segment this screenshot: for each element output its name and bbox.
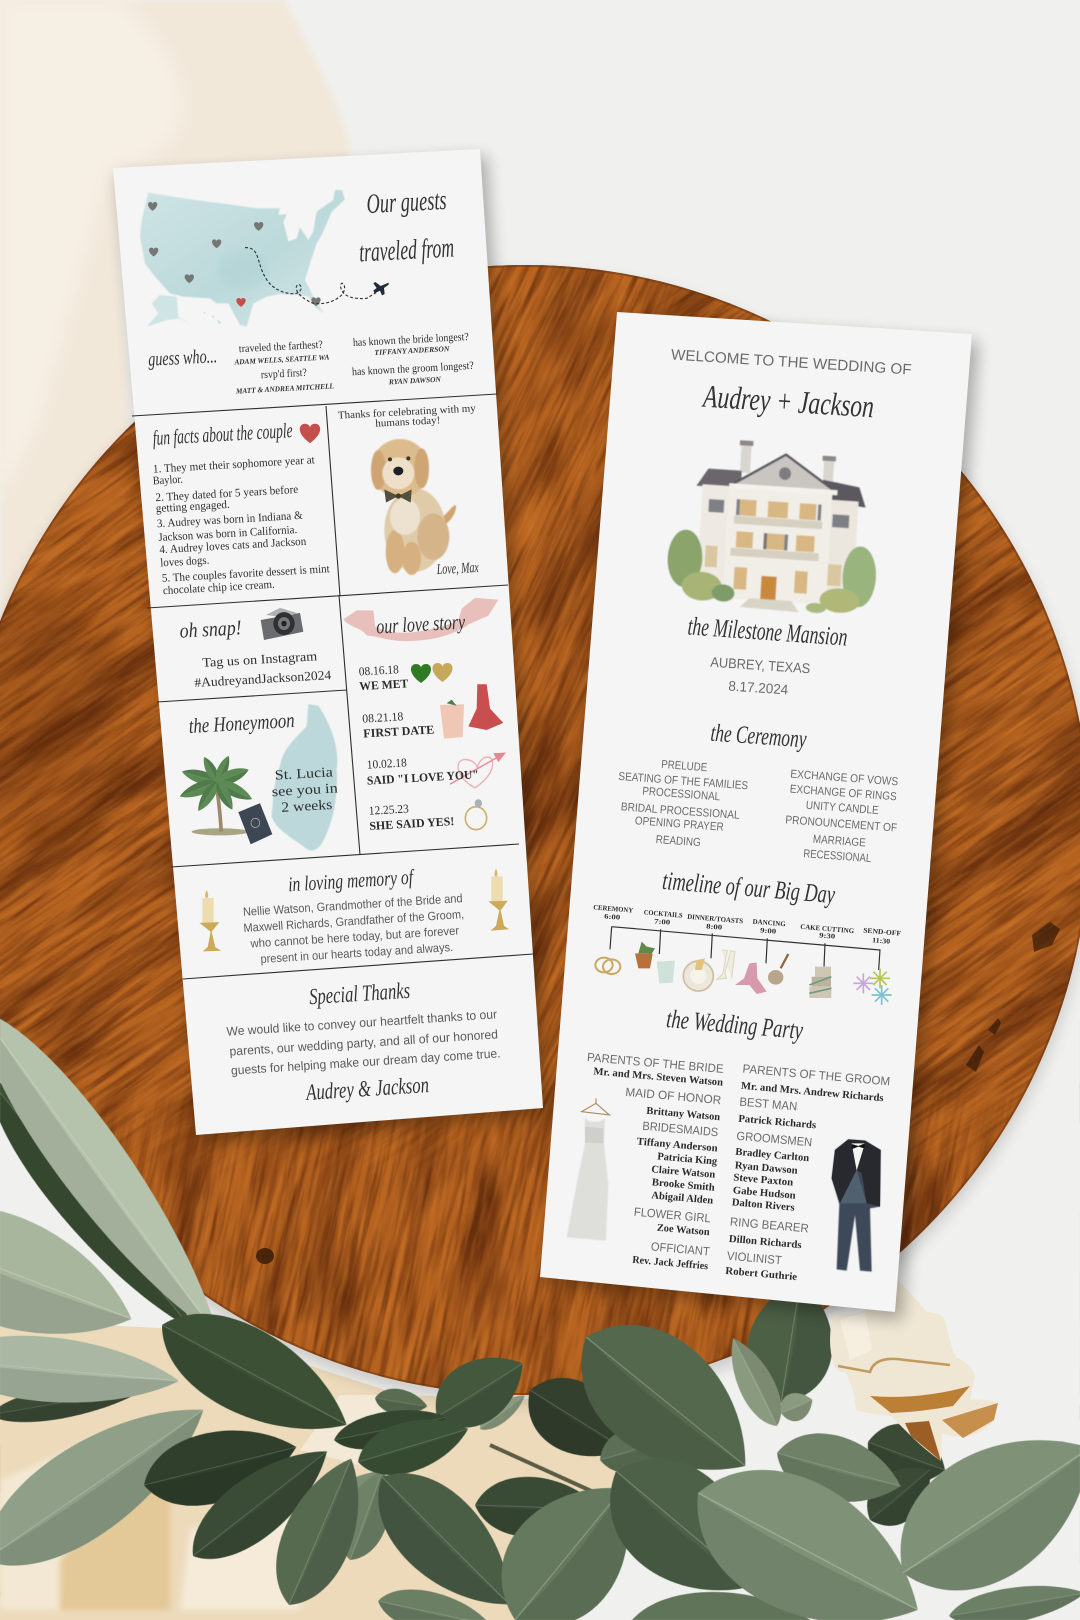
cream cloth top left (0, 0, 350, 660)
icon: cocktail and red dress (440, 684, 503, 739)
timeline labels: CAKE CUTTING (800, 923, 855, 935)
ceremony list left: SEATING OF THE FAMILIES (618, 771, 749, 792)
timeline labels: 11:30 (872, 936, 891, 946)
panel: special thanks: Special Thanks (308, 978, 411, 1009)
panel: right card, ceremony program (540, 312, 978, 1320)
bride's side names (586, 1050, 724, 1272)
groom's side names: GROOMSMEN (736, 1129, 813, 1149)
fun facts list: Jackson was born in California. (158, 524, 298, 544)
fun facts list (153, 454, 331, 597)
timeline labels: 9:30 (819, 931, 836, 941)
panel: left card, infographic reception program (113, 149, 548, 1144)
groom's side names: Robert Guthrie (725, 1266, 798, 1283)
panel: our love story timeline: SHE SAID YES! (369, 814, 455, 833)
heading: welcome and couple names: WELCOME TO THE WEDDING OF (670, 346, 912, 379)
guess who quiz: has known the bride longest? (353, 331, 469, 349)
foliage: sage green leaves (0, 950, 1080, 1620)
groom's side names: Patrick Richards (738, 1114, 817, 1131)
ceremony list right: MARRIAGE (812, 834, 866, 850)
panel: the ceremony order (618, 720, 899, 865)
icon: dinner plate (683, 958, 713, 991)
panel: special thanks: parents, our wedding party, and all of our honored (229, 1027, 498, 1059)
icon: groom's tuxedo (832, 1139, 881, 1272)
bride's side names: Rev. Jack Jeffries (632, 1255, 709, 1272)
groom's side names: Dillon Richards (728, 1234, 802, 1251)
map of the USA (140, 190, 389, 327)
groom's side names: Ryan Dawson (734, 1160, 798, 1177)
icon: guitar (768, 954, 788, 985)
bride's side names: Mr. and Mrs. Steven Watson (593, 1066, 724, 1089)
panel: in loving memory: who cannot be here today, but are forever (249, 923, 459, 951)
icon: sparklers (853, 968, 892, 1005)
location hearts (148, 202, 321, 307)
guess who quiz: MATT & ANDREA MITCHELL (235, 381, 334, 396)
venue details: the Milestone Mansion (687, 611, 848, 652)
ceremony list right: RECESSIONAL (803, 848, 872, 865)
panel: the honeymoon in St. Lucia: St. Lucia (274, 765, 334, 784)
timeline labels: SEND-OFF (863, 926, 901, 938)
heading: our guests traveled from: traveled from (358, 233, 455, 268)
panel: fun facts about the couple (152, 418, 331, 597)
icon: wedding cake (809, 967, 831, 998)
ceremony list left: READING (655, 834, 701, 849)
icon: passport (238, 803, 272, 844)
venue details (687, 611, 848, 697)
panel: in loving memory: Maxwell Richards, Grandfather of the Groom, (243, 907, 464, 935)
guess who quiz: has known the groom longest? (352, 360, 474, 378)
panel: our love story timeline: 10.02.18 (366, 755, 407, 772)
icon: palm tree (178, 754, 255, 835)
bride's side names: Abigail Alden (651, 1190, 714, 1207)
timeline labels: 8:00 (706, 922, 723, 932)
venue details: AUBREY, TEXAS (710, 654, 811, 676)
icon: champagne flutes (717, 950, 735, 979)
bride's side names: OFFICIANT (650, 1239, 711, 1259)
wooden round board (0, 250, 1080, 1410)
bride's side names: Zoe Watson (656, 1223, 710, 1238)
panel: oh snap instagram tag: #AudreyandJackson2024 (194, 667, 332, 690)
timeline labels (593, 903, 901, 946)
illustration: watercolor mansion (665, 436, 883, 617)
guess who quiz: RYAN DAWSON (388, 375, 442, 386)
icon: left candle (199, 890, 221, 951)
ceremony list left (618, 759, 749, 849)
panel: oh snap instagram tag: Tag us on Instagram (202, 648, 318, 670)
icon: heart with arrow (450, 752, 506, 788)
panel: special thanks: We would like to convey our heartfelt thanks to our (226, 1007, 497, 1039)
icon: glass tumbler (657, 961, 675, 983)
ceremony list right (785, 768, 899, 865)
panel: our love story timeline: 08.16.18 (358, 662, 399, 678)
dried cream rose (830, 1280, 998, 1461)
panel: oh snap instagram tag: oh snap! (179, 615, 242, 643)
groom's side names: RING BEARER (729, 1215, 810, 1235)
panel: timeline of our big day (593, 866, 901, 1005)
fun facts list: 5. The couples favorite dessert is mint (162, 563, 331, 585)
ceremony list left: PROCESSIONAL (642, 786, 721, 803)
panel: thanks from the dog: Thanks for celebrating with my (338, 403, 477, 422)
panel: guest travel map (140, 185, 474, 396)
groom's side names: Steve Paxton (733, 1172, 794, 1189)
guess who quiz (148, 331, 474, 396)
ceremony list right: PRONOUNCEMENT OF (785, 814, 898, 835)
guess who quiz: guess who... (148, 345, 218, 371)
panel: our love story timeline: 12.25.23 (368, 801, 409, 818)
timeline labels: 7:00 (654, 917, 671, 927)
icon: camera (261, 608, 303, 640)
icon: red heart (300, 424, 320, 443)
guess who quiz: ADAM WELLS, SEATTLE WA (233, 353, 330, 367)
icon: pink watercolor ribbon (343, 598, 498, 641)
panel: fun facts about the couple: fun facts about the couple (152, 418, 293, 450)
panel: oh snap instagram tag (179, 608, 332, 690)
guess who quiz: traveled the farthest? (239, 339, 323, 355)
signature: Audrey and Jackson: Audrey & Jackson (304, 1072, 430, 1105)
signature: Love, Max: Love, Max (436, 560, 479, 578)
groom's side names: Mr. and Mrs. Andrew Richards (741, 1081, 884, 1104)
fun facts list: Baylor. (153, 474, 183, 487)
bride's side names: Brooke Smith (651, 1177, 715, 1194)
panel: our love story timeline: 08.21.18 (362, 709, 404, 726)
heading: welcome and couple names: Audrey + Jackson (701, 378, 875, 424)
panel: in loving memory: present in our hearts today and always. (260, 940, 453, 966)
bride's side names: Tiffany Anderson (636, 1137, 718, 1155)
icon: moscow mule (635, 942, 655, 968)
bride's side names: Claire Watson (651, 1164, 716, 1181)
groom's side names: Dalton Rivers (731, 1197, 795, 1214)
timeline axis with icons (595, 927, 892, 1005)
heading: our guests traveled from: Our guests (366, 185, 447, 220)
heading: welcome and couple names (670, 346, 912, 424)
bride's side names: Patricia King (657, 1151, 718, 1168)
bride's side names: FLOWER GIRL (633, 1205, 712, 1225)
panel: in loving memory: Nellie Watson, Grandmother of the Bride and (243, 891, 463, 919)
icon: watercolor goldendoodle with bow tie (371, 439, 456, 575)
fun facts list: 4. Audrey loves cats and Jackson (159, 536, 307, 556)
panel: the wedding party: the Wedding Party (665, 1004, 805, 1045)
groom's side names: Gabe Hudson (732, 1185, 796, 1202)
cream cloth bottom left (0, 1320, 640, 1620)
panel: the honeymoon in St. Lucia: the Honeymoon (188, 708, 295, 738)
guess who quiz: TIFFANY ANDERSON (374, 344, 450, 357)
fun facts list: loves dogs. (160, 555, 210, 569)
bride's side names: Brittany Watson (646, 1106, 721, 1123)
groom's side names: BEST MAN (739, 1095, 798, 1114)
panel: in loving memory: in loving memory of (287, 865, 416, 896)
panel: the honeymoon in St. Lucia: see you in (271, 781, 338, 800)
panel: the wedding party (567, 1004, 891, 1283)
timeline labels: CEREMONY (593, 903, 633, 915)
icon: wedding dress on hanger (567, 1098, 609, 1241)
panel: in loving memory (199, 865, 509, 966)
fun facts list: chocolate chip ice cream. (163, 579, 275, 597)
panel: our love story timeline (343, 598, 506, 833)
ceremony list left: PRELUDE (661, 759, 708, 774)
timeline labels: DINNER/TOASTS (687, 913, 744, 925)
timeline labels: COCKTAILS (643, 908, 683, 920)
icon: green and gold hearts (411, 663, 453, 683)
panel: timeline of our big day: timeline of our Big Day (661, 866, 836, 909)
bride's side names: BRIDESMAIDS (642, 1119, 719, 1139)
fun facts list: 3. Audrey was born in Indiana & (157, 510, 303, 530)
groom's side names: Bradley Carlton (735, 1147, 810, 1164)
panel: thanks from the dog: humans today! (375, 415, 441, 430)
dashed flight route (245, 248, 376, 304)
ceremony list right: UNITY CANDLE (805, 800, 879, 817)
icon: St. Lucia island watercolor (272, 704, 337, 851)
fun facts list: 1. They met their sophomore year at (153, 454, 316, 476)
heading: our guests traveled from (358, 185, 455, 268)
bride's side names: MAID OF HONOR (625, 1085, 722, 1107)
panel: our love story timeline: SAID "I LOVE YOU" (366, 767, 479, 788)
panel: our love story timeline: FIRST DATE (363, 722, 435, 740)
panel: the ceremony order: the Ceremony (710, 720, 808, 753)
panel: special thanks: guests for helping make our dream day come true. (231, 1046, 501, 1078)
timeline labels: 9:00 (760, 926, 777, 936)
ceremony list left: OPENING PRAYER (634, 815, 724, 834)
bride's side names: PARENTS OF THE BRIDE (586, 1050, 724, 1076)
ceremony list left: BRIDAL PROCESSIONAL (620, 801, 741, 822)
ceremony list right: EXCHANGE OF RINGS (789, 784, 897, 803)
panel: special thanks (226, 978, 501, 1105)
icon: right candle (488, 869, 509, 931)
groom's side names (725, 1062, 891, 1283)
groom's side names: PARENTS OF THE GROOM (742, 1062, 891, 1088)
panel: our love story timeline: our love story (375, 609, 466, 639)
fun facts list: 2. They dated for 5 years before (155, 484, 299, 504)
panel: the honeymoon in St. Lucia (178, 704, 338, 851)
venue details: 8.17.2024 (728, 678, 789, 697)
guess who quiz: rsvp'd first? (261, 367, 307, 381)
timeline labels: DANCING (752, 918, 786, 928)
panel: our love story timeline: WE MET (359, 676, 409, 693)
panel: thanks from the dog (338, 403, 479, 578)
fun facts list: getting engaged. (156, 499, 230, 515)
icon: cowgirl boots (735, 963, 767, 994)
icon: wedding rings (595, 958, 620, 974)
panel: the honeymoon in St. Lucia: 2 weeks (281, 798, 333, 816)
icon: engagement ring (465, 799, 487, 830)
timeline labels: 6:00 (604, 912, 621, 922)
ceremony list right: EXCHANGE OF VOWS (790, 768, 899, 788)
icon: airplane (373, 282, 389, 295)
groom's side names: VIOLINIST (726, 1249, 783, 1267)
